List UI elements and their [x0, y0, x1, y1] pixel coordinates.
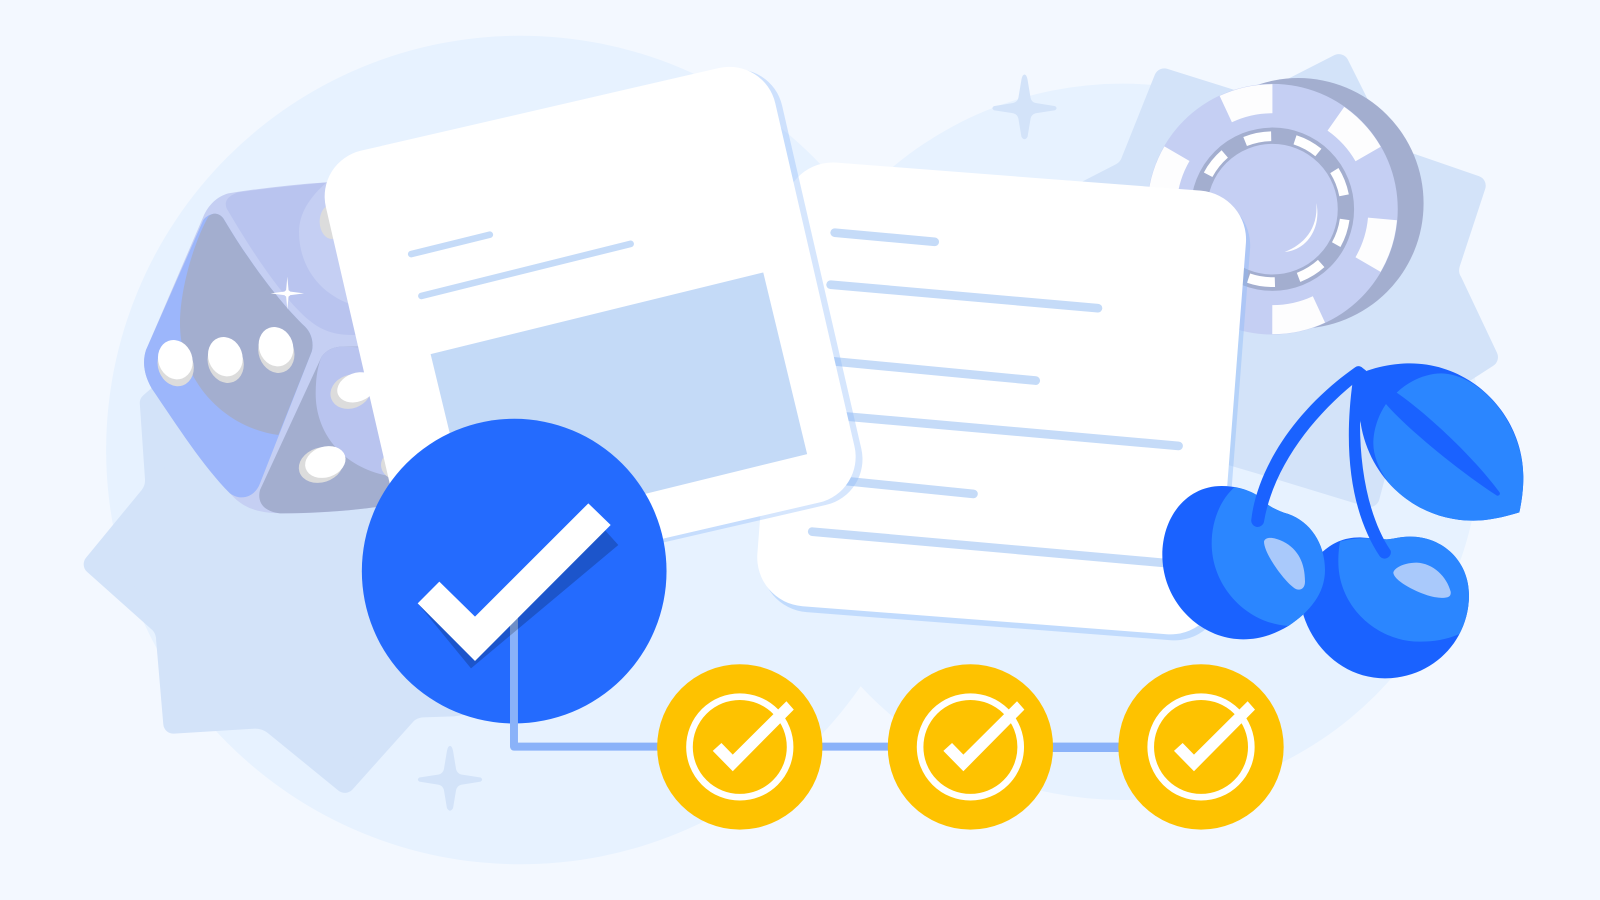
- gold check badge 1: [657, 664, 822, 830]
- panel: back document: [754, 159, 1254, 644]
- document image block: [431, 272, 807, 536]
- connector line: [514, 613, 1122, 747]
- panel: front document: [315, 57, 872, 598]
- left background circle: [106, 36, 935, 864]
- sparkle: bottom: [418, 746, 482, 811]
- document heading lines: [411, 235, 631, 296]
- connector segment: [1051, 743, 1122, 752]
- icon: poker chip: [1126, 62, 1424, 356]
- document text lines: [812, 233, 1179, 563]
- big check badge: [362, 419, 1122, 747]
- icon: cherries: [1162, 363, 1523, 678]
- sparkle: top: [992, 74, 1057, 139]
- left starburst: [94, 265, 531, 783]
- icon: dice: [144, 182, 427, 513]
- right starburst: [1020, 64, 1488, 497]
- gold check badge 3: [1118, 664, 1284, 830]
- gold check badge 2: [888, 664, 1053, 830]
- right background circle: [764, 84, 1481, 800]
